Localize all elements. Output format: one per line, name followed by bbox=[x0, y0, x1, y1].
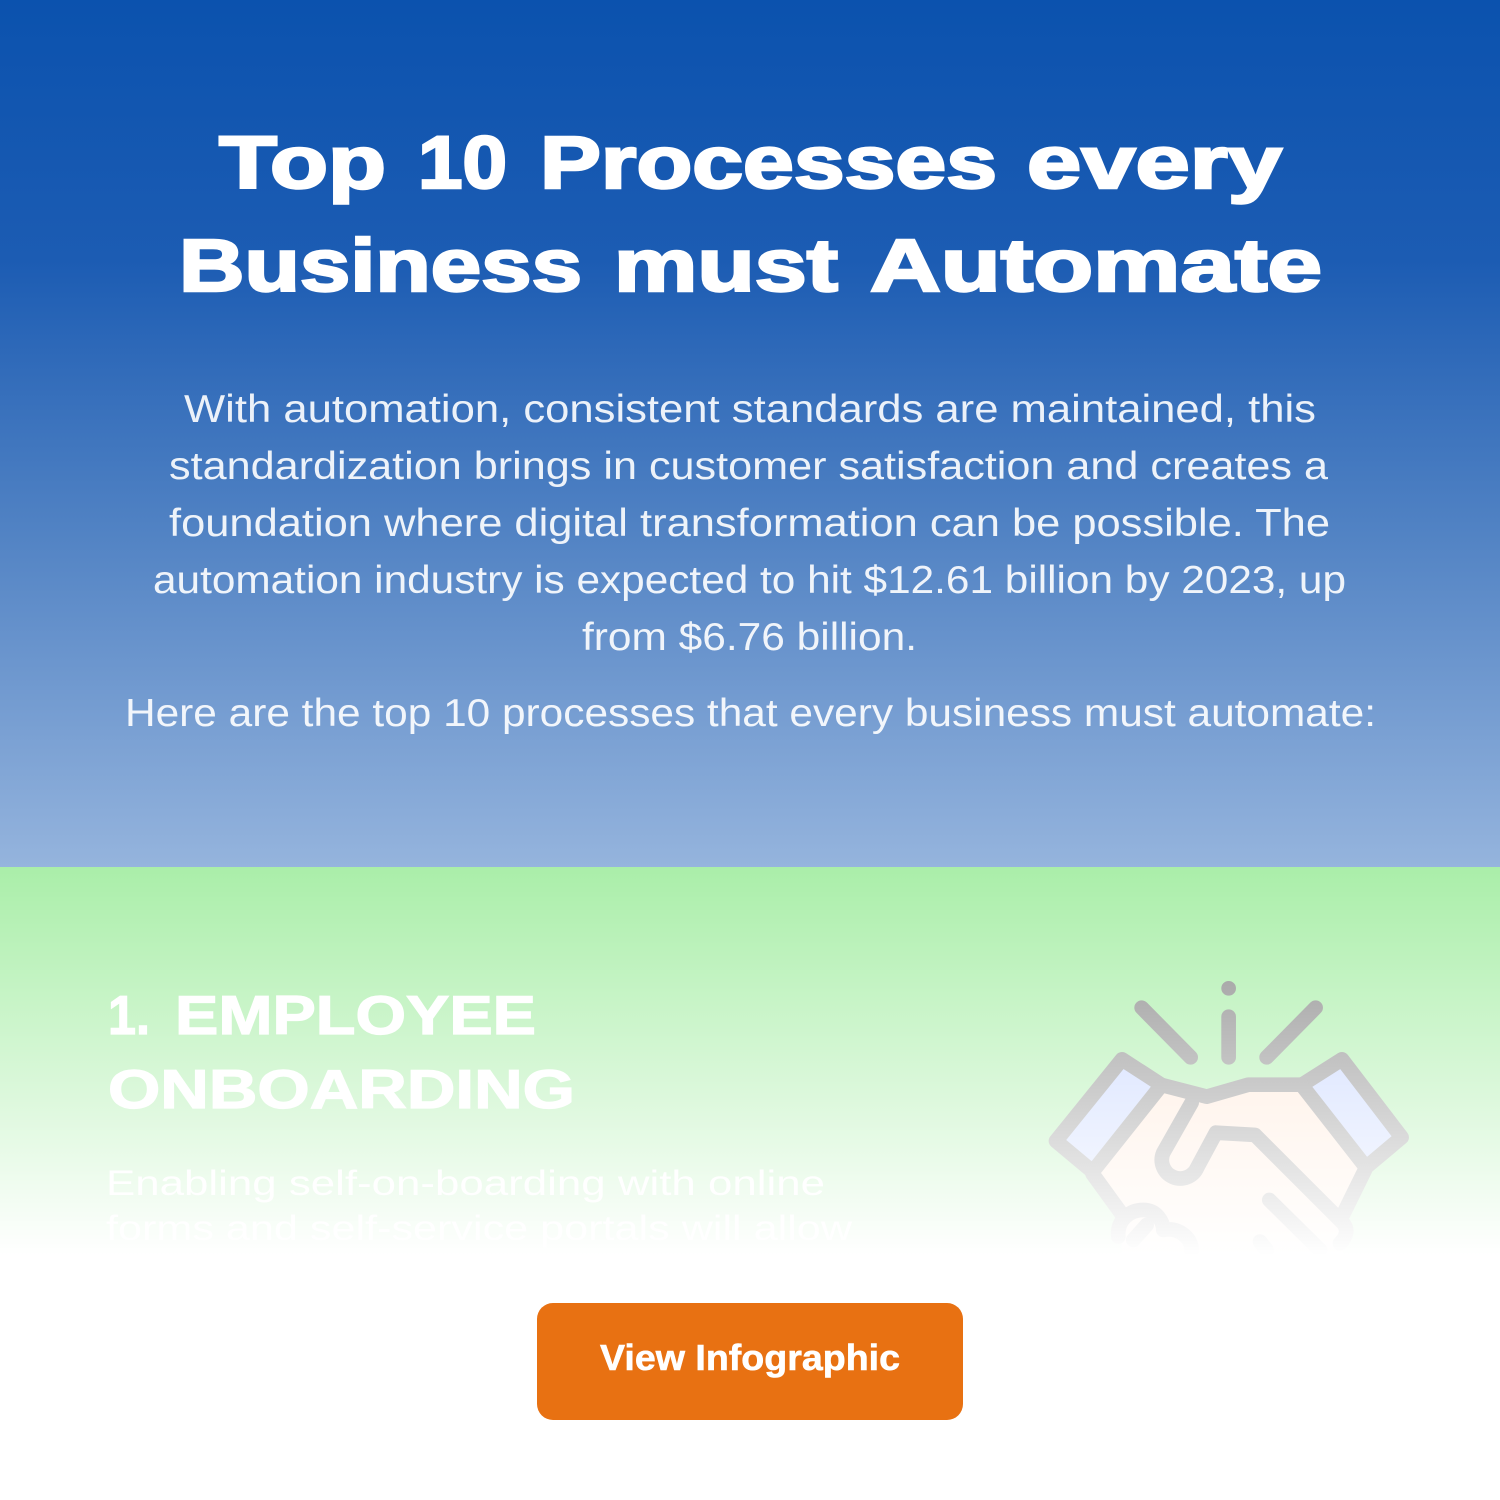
title: must bbox=[614, 224, 838, 307]
intro paragraph bbox=[153, 388, 1346, 659]
section body text bbox=[106, 1164, 853, 1248]
panel: blue header background bbox=[0, 0, 1500, 867]
intro paragraph: from $6.76 billion. bbox=[582, 616, 917, 659]
title: Business bbox=[179, 224, 582, 307]
title: Processes bbox=[540, 121, 997, 204]
lead-in sentence: Here are the top 10 processes that every business must automate: bbox=[125, 692, 1376, 735]
intro paragraph: With automation, consistent standards are maintained, this bbox=[184, 388, 1316, 431]
section heading: employee onboarding: 1. bbox=[108, 984, 150, 1046]
spark rays bbox=[1142, 988, 1316, 1057]
title bbox=[179, 121, 1322, 307]
section heading: employee onboarding: EMPLOYEE bbox=[175, 984, 536, 1046]
title: Top bbox=[219, 121, 386, 204]
right cuff bbox=[1302, 1059, 1402, 1167]
title: Automate bbox=[870, 224, 1322, 307]
section heading: employee onboarding: ONBOARDING bbox=[108, 1058, 575, 1120]
panel: green section background bbox=[0, 867, 1500, 1267]
title: 10 bbox=[418, 121, 507, 204]
left cuff bbox=[1056, 1059, 1162, 1172]
hand outlines bbox=[1093, 1085, 1365, 1250]
intro paragraph: automation industry is expected to hit $12.61 billion by 2023, up bbox=[153, 559, 1346, 602]
button: view infographic: View Infographic bbox=[600, 1337, 900, 1378]
panel: white footer bbox=[0, 1255, 1500, 1500]
section heading: employee onboarding bbox=[108, 984, 575, 1120]
hands fill bbox=[1093, 1085, 1365, 1260]
section body text: Enabling self-on-boarding with online bbox=[106, 1164, 825, 1203]
intro paragraph: standardization brings in customer satisfaction and creates a bbox=[169, 445, 1328, 488]
title: every bbox=[1027, 121, 1282, 204]
intro paragraph: foundation where digital transformation can be possible. The bbox=[169, 502, 1330, 545]
icon: handshake bbox=[1056, 988, 1402, 1260]
section body text: forms and self-service portals will allow bbox=[106, 1209, 853, 1248]
white fade overlay bbox=[0, 862, 1500, 1255]
button: view infographic bbox=[537, 1303, 963, 1420]
